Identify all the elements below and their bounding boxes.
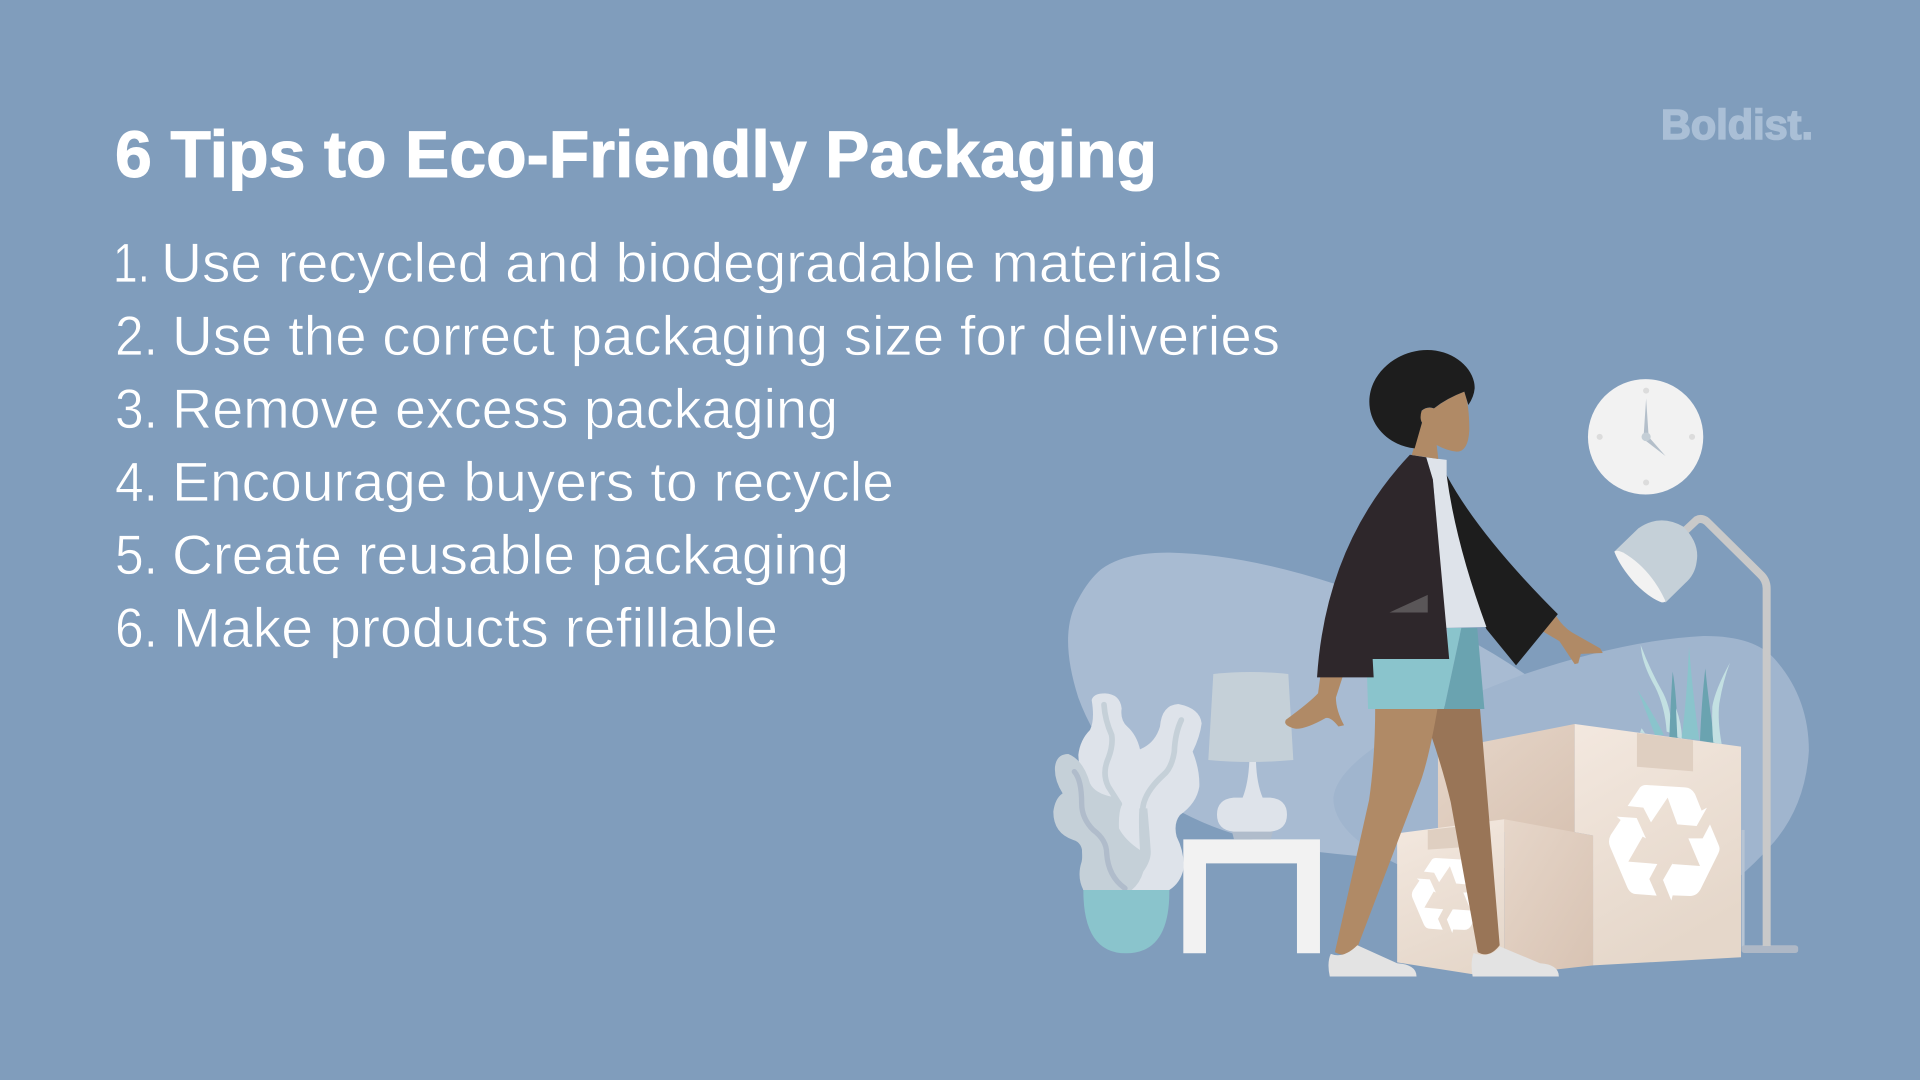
person — [1285, 455, 1603, 977]
shirt — [1426, 457, 1486, 628]
jacket pocket — [1389, 595, 1428, 612]
recycling symbol small — [1412, 858, 1484, 933]
tip 3: 3. — [115, 377, 158, 440]
recycling symbol large — [1609, 785, 1720, 901]
floor lamp — [1614, 519, 1798, 953]
logo: Boldist: Boldist. — [1661, 101, 1813, 148]
jacket back sleeve — [1447, 475, 1558, 665]
tip 6: Make products refillable — [173, 596, 778, 659]
shoes — [1328, 945, 1559, 977]
tip 5: 5. — [115, 523, 158, 586]
back arm hand — [1543, 616, 1603, 664]
front arm hand — [1285, 674, 1344, 729]
plant leaves in box — [1638, 645, 1730, 744]
table lamp — [1208, 672, 1293, 839]
small box tape — [1428, 826, 1466, 850]
large cardboard box — [1438, 724, 1741, 965]
head — [1369, 350, 1475, 459]
front leg — [1335, 706, 1438, 955]
tip 2: Use the correct packaging size for deliveries — [172, 304, 1280, 367]
illustration: person walking past recycling boxes — [1053, 350, 1809, 977]
tip 3: Remove excess packaging — [172, 377, 838, 440]
tip 5: Create reusable packaging — [172, 523, 849, 586]
hair — [1369, 350, 1475, 448]
neck and face — [1412, 392, 1469, 459]
side table — [1183, 839, 1320, 953]
tip 2: 2. — [115, 304, 158, 367]
tip 1: Use recycled and biodegradable materials — [161, 231, 1222, 294]
title: 6 Tips to Eco-Friendly Packaging — [115, 117, 1157, 191]
potted plant — [1053, 693, 1202, 953]
background blob right — [1333, 636, 1809, 877]
plant back leaf — [1078, 693, 1202, 890]
plant pot — [1083, 890, 1169, 953]
tip 4: Encourage buyers to recycle — [172, 450, 894, 513]
tip 6: 6. — [115, 596, 158, 659]
tip 4: 4. — [115, 450, 158, 513]
plant front leaf — [1053, 754, 1151, 890]
wall clock — [1588, 379, 1703, 495]
plant veins — [1104, 705, 1181, 810]
tips list — [113, 231, 1280, 659]
tip 1: 1. — [113, 231, 150, 294]
background blob left — [1068, 553, 1525, 860]
back leg — [1431, 706, 1500, 954]
jacket — [1317, 455, 1449, 677]
plant dark vein — [1074, 772, 1125, 888]
skirt — [1367, 628, 1461, 709]
small cardboard box — [1397, 819, 1593, 974]
box tape — [1637, 733, 1693, 771]
